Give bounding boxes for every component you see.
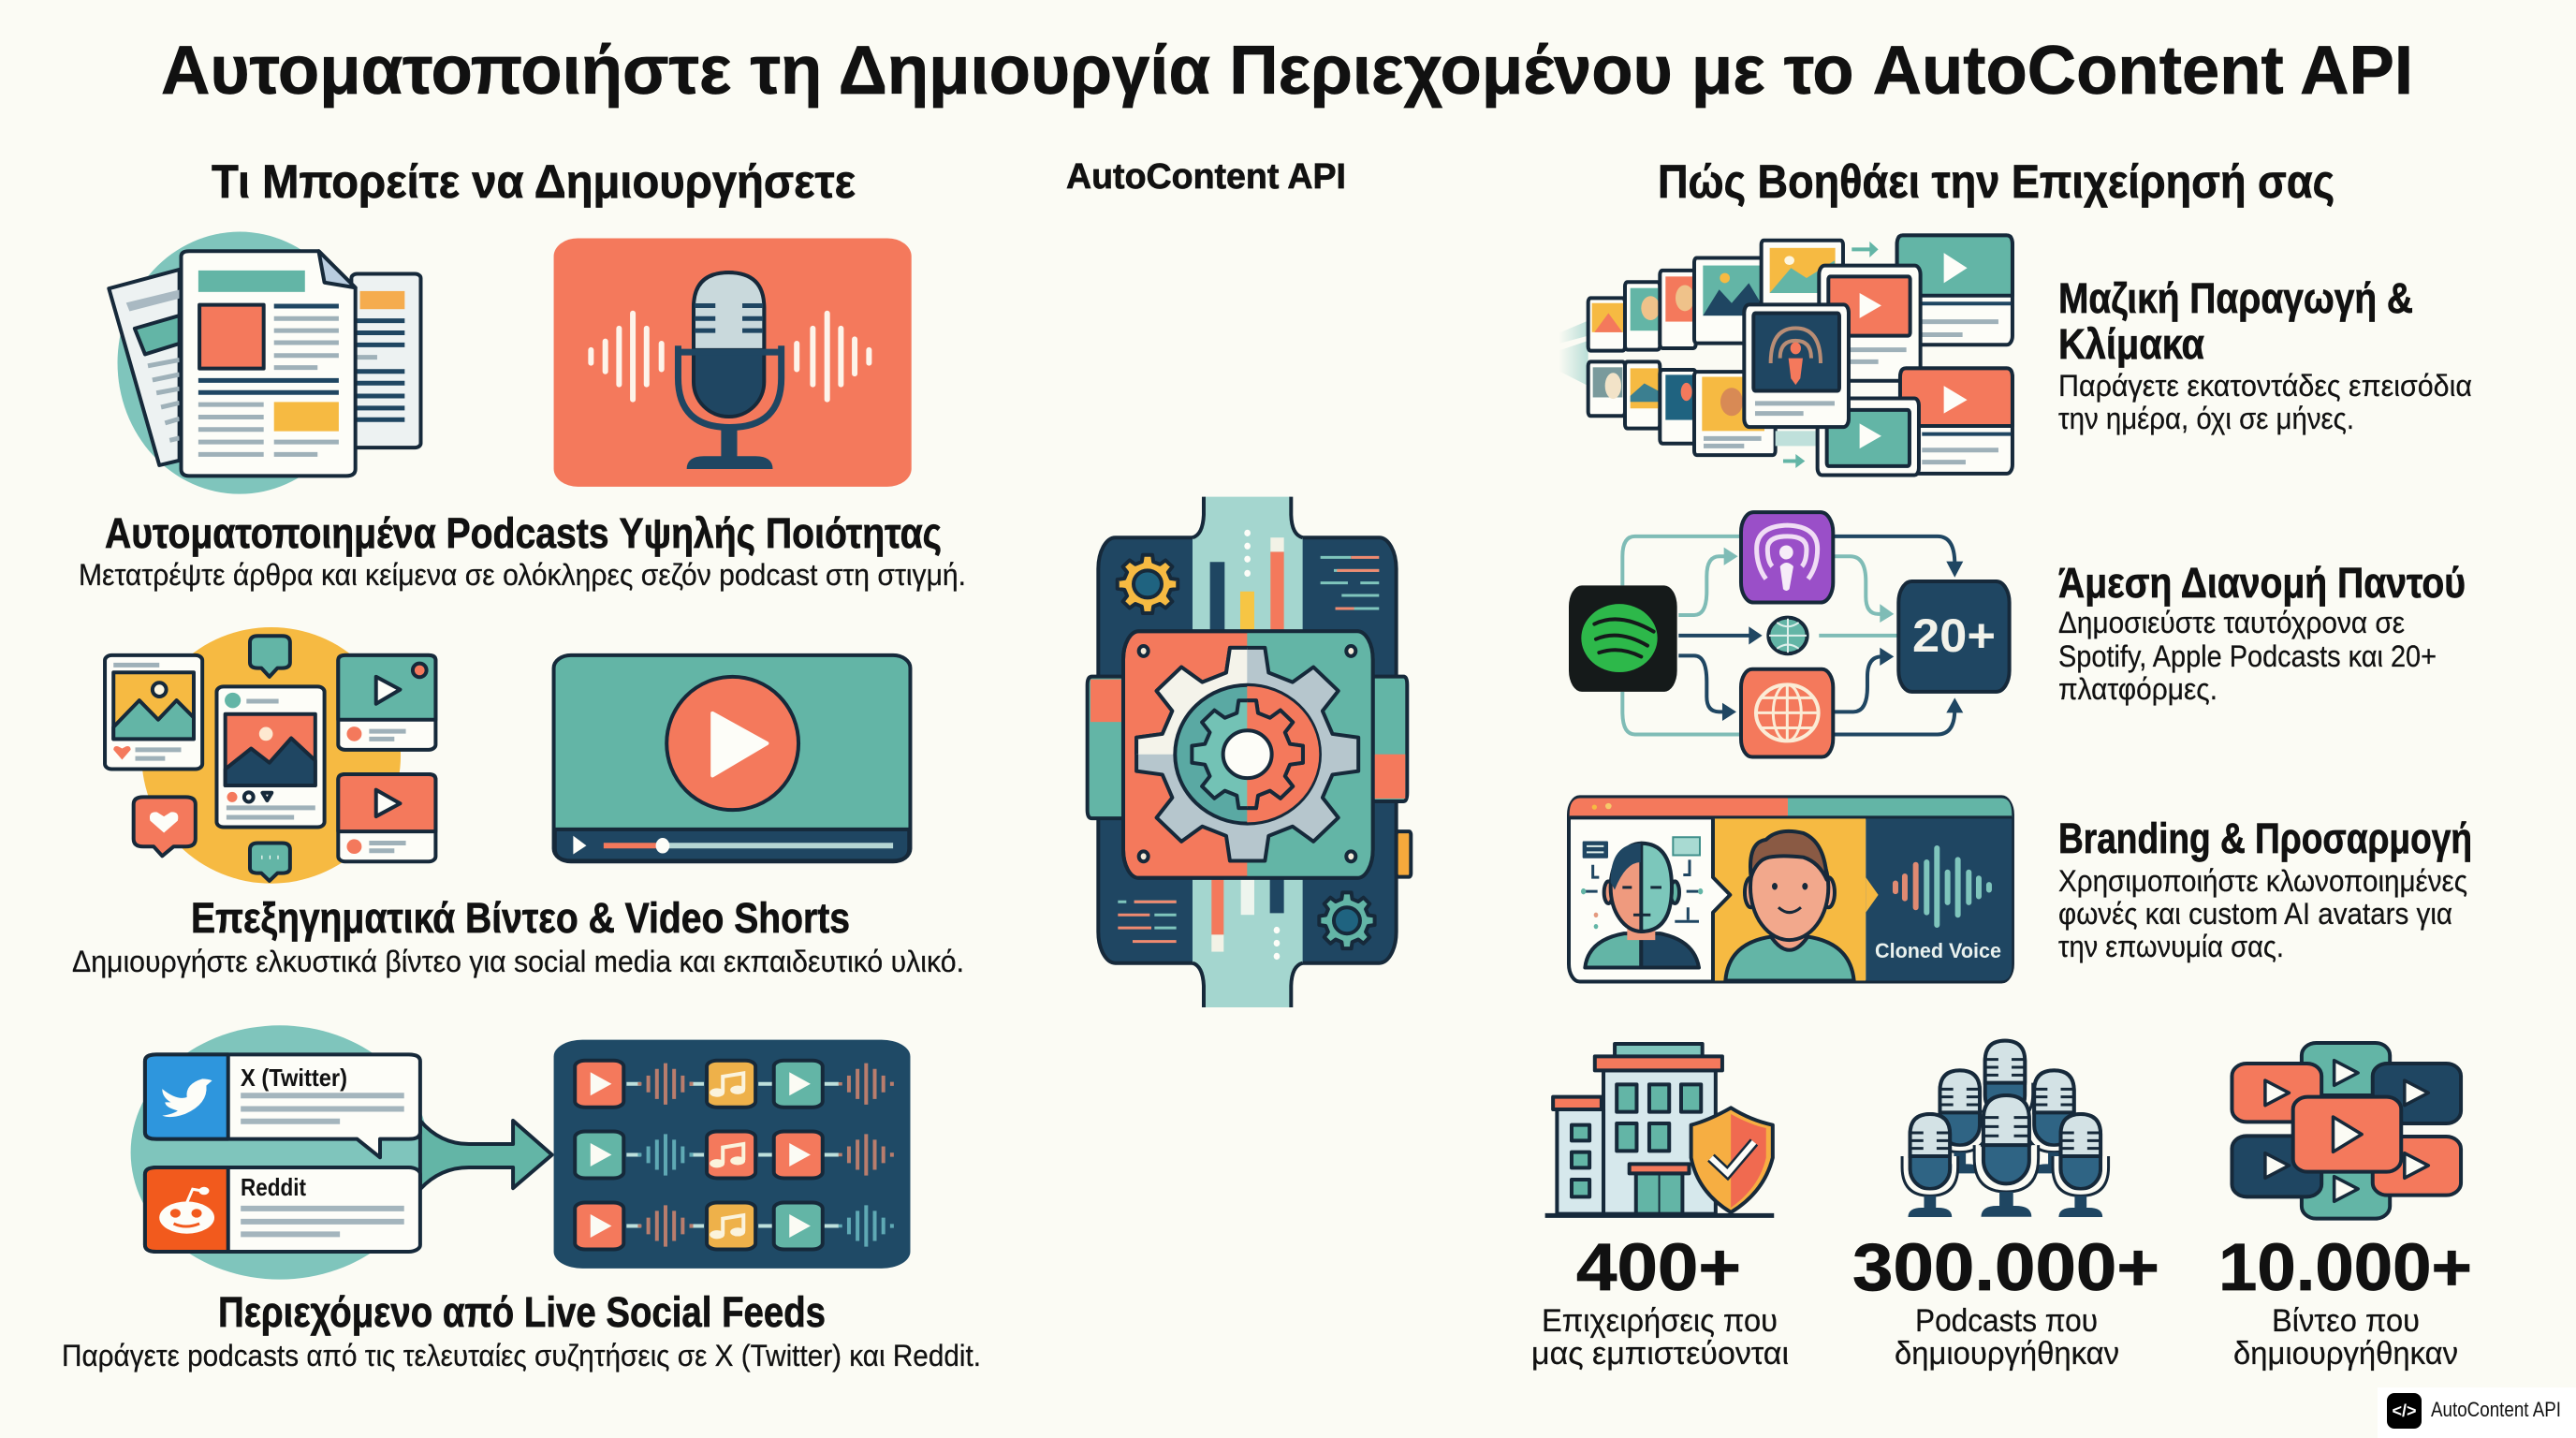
- description: podcasts: Μετατρέψτε άρθρα και κείμενα σε ολόκληρες σεζόν podcast στη στιγμή.: [79, 558, 966, 592]
- panel: branding: [1569, 797, 2472, 982]
- badge: AutoContent API watermark: </>: [2392, 1401, 2417, 1420]
- panel: mass production: [1559, 235, 2472, 475]
- description: mass production: την ημέρα, όχι σε μήνες.: [2058, 402, 2354, 435]
- description: branding: [2058, 864, 2467, 963]
- icon: central API gear machine: [1088, 497, 1411, 1007]
- panel: statistic videos: [2218, 1043, 2472, 1372]
- heading: mass production: Κλίμακα: [2058, 320, 2204, 368]
- icon: stacked content cards: [1559, 235, 2012, 475]
- icon: video player: [554, 655, 910, 861]
- description: videos: Δημιουργήστε ελκυστικά βίντεο για social media και εκπαιδευτικό υλικό.: [72, 945, 964, 978]
- heading: branding: Branding & Προσαρμογή: [2058, 814, 2472, 862]
- icon: video tiles: [2232, 1043, 2461, 1219]
- label: podcasts: δημιουργήθηκαν: [1895, 1336, 2119, 1372]
- icon: social cards: [105, 627, 435, 884]
- label: videos: [2233, 1303, 2458, 1372]
- heading: live social feeds: Περιεχόμενο από Live Social Feeds: [218, 1288, 826, 1336]
- icon: distribution network: [1569, 512, 2010, 757]
- description: instant distribution: Δημοσιεύστε ταυτόχρονα σε: [2058, 606, 2405, 639]
- icon: newspaper documents: [109, 232, 420, 494]
- label: videos: Βίντεο που: [2272, 1303, 2420, 1339]
- heading: what you can create: Τι Μπορείτε να Δημιουργήσετε: [212, 155, 856, 208]
- panel: live social feeds: [62, 1025, 981, 1372]
- badge: AutoContent API watermark: [2378, 1387, 2576, 1438]
- label: podcasts: [1895, 1303, 2119, 1372]
- heading: mass production: [2058, 274, 2413, 368]
- heading: how it helps: Πώς Βοηθάει την Επιχείρησή σας: [1658, 155, 2334, 208]
- heading: explainer videos: Επεξηγηματικά Βίντεο & Video Shorts: [191, 894, 850, 942]
- label: businesses: [1531, 1303, 1789, 1372]
- heading: instant distribution: Άμεση Διανομή Παντού: [2058, 559, 2466, 607]
- label: X (Twitter): X (Twitter): [241, 1064, 347, 1092]
- heading: mass production: Μαζική Παραγωγή &: [2058, 274, 2413, 322]
- panel: statistic businesses: [1531, 1044, 1789, 1372]
- panel: instant distribution: [1569, 512, 2466, 757]
- label: cloned voice: Cloned Voice: [1875, 939, 2001, 962]
- heading: brand name: AutoContent API: [1066, 157, 1346, 197]
- description: mass production: Παράγετε εκατοντάδες επεισόδια: [2058, 369, 2472, 403]
- number: 400+: 400+: [1576, 1231, 1741, 1305]
- panel: statistic podcasts: [1852, 1041, 2159, 1372]
- description: instant distribution: [2058, 606, 2437, 706]
- icon: microphone card: [554, 238, 912, 487]
- description: branding: φωνές και custom AI avatars για: [2058, 897, 2452, 931]
- title: Αυτοματοποιήστε τη Δημιουργία Περιεχομένου με το AutoContent API: [161, 33, 2413, 109]
- icon: avatar and cloned voice: [1569, 797, 2012, 982]
- icon: generated media grid: [554, 1040, 910, 1269]
- label: Reddit: Reddit: [241, 1173, 306, 1201]
- number: 300.000+: 300.000+: [1852, 1231, 2159, 1305]
- description: mass production: [2058, 369, 2472, 435]
- label: businesses: Επιχειρήσεις που: [1542, 1303, 1778, 1339]
- heading: automated podcasts: Αυτοματοποιημένα Podcasts Υψηλής Ποιότητας: [105, 509, 942, 557]
- description: instant distribution: Spotify, Apple Podcasts και 20+: [2058, 639, 2437, 673]
- description: branding: την επωνυμία σας.: [2058, 930, 2284, 963]
- description: social feeds: Παράγετε podcasts από τις τελευταίες συζητήσεις σε X (Twitter) και Reddit.: [62, 1339, 981, 1372]
- description: branding: Χρησιμοποιήστε κλωνοποιημένες: [2058, 864, 2467, 898]
- label: podcasts: Podcasts που: [1915, 1303, 2098, 1339]
- label: businesses: μας εμπιστεύονται: [1531, 1336, 1789, 1372]
- label: 20+ platforms: 20+: [1912, 609, 1996, 662]
- icon: social feed cards with arrow: [131, 1025, 552, 1280]
- label: videos: δημιουργήθηκαν: [2233, 1336, 2458, 1372]
- panel: podcasts: [79, 232, 966, 592]
- icon: microphone group: [1902, 1041, 2109, 1217]
- icon: building with shield: [1545, 1044, 1774, 1215]
- panel: videos: [72, 627, 964, 978]
- description: instant distribution: πλατφόρμες.: [2058, 672, 2217, 706]
- number: 10.000+: 10.000+: [2218, 1231, 2472, 1305]
